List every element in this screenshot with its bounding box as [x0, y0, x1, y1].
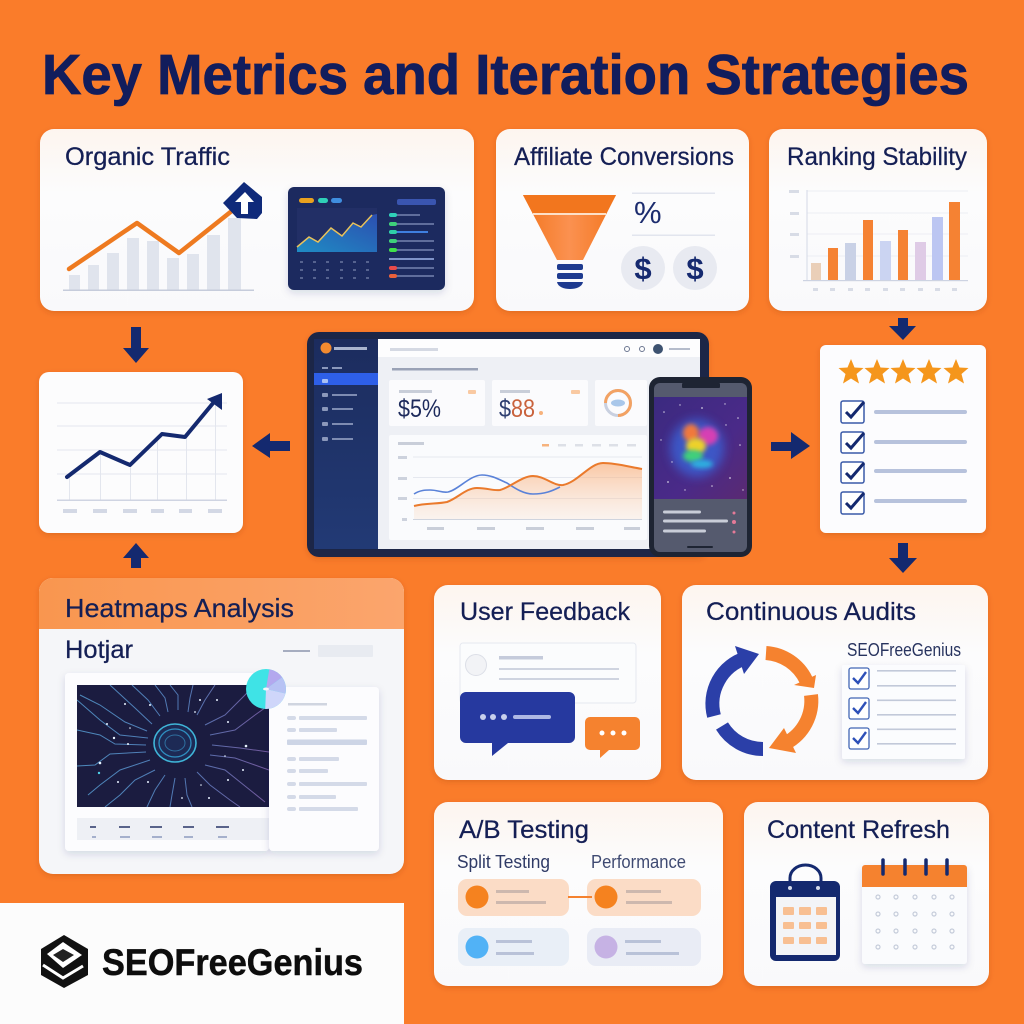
title: Key Metrics and Iteration Strategies [42, 43, 969, 107]
bar chart [789, 190, 968, 291]
icon: five stars [838, 359, 968, 384]
logo block [0, 903, 404, 1024]
header band [39, 578, 404, 629]
icon: clipboard calendar [770, 865, 840, 961]
arrow: up to growth chart [123, 543, 149, 568]
variant row: orange [458, 879, 701, 916]
heading: a/b testing: A/B Testing [459, 816, 589, 844]
heatmap image [77, 685, 269, 807]
heading: heatmaps analysis: Heatmaps Analysis [65, 593, 294, 623]
icon: wall calendar [862, 860, 967, 964]
bar and line chart with up arrow [63, 182, 262, 291]
heading: affiliate conversions: Affiliate Conversions [514, 143, 734, 171]
tablet main area [378, 339, 700, 549]
side details panel [269, 687, 379, 851]
browser frame [65, 673, 269, 851]
arrow: down to growth chart [123, 327, 149, 363]
heading: content refresh: Content Refresh [767, 816, 950, 844]
column label: split testing: Split Testing [457, 852, 550, 872]
panel: growth line chart [39, 372, 243, 533]
tablet top bar [378, 339, 700, 370]
arrow: right from dashboard [771, 432, 810, 459]
panel: ratings checklist [820, 345, 986, 533]
KPI card: revenue [492, 380, 588, 426]
icon: orange speech bubble [585, 717, 640, 758]
phone mockup [649, 377, 752, 557]
icon: dollar coins: $ [634, 251, 652, 286]
subheading: hotjar: Hotjar [65, 636, 133, 664]
heading: continuous audits: Continuous Audits [706, 598, 916, 626]
icon: dollar coins: $ [686, 251, 704, 286]
percent metric: % [634, 195, 662, 230]
heading: user feedback: User Feedback [460, 598, 630, 626]
icon: blue speech bubble [460, 692, 575, 756]
percent metric [632, 192, 715, 236]
area line chart [389, 435, 647, 540]
checklist rows [841, 401, 967, 514]
label: brand: SEOFreeGenius [847, 640, 961, 660]
tablet sidebar [314, 339, 378, 549]
icon: logo hexagon [41, 935, 88, 988]
arrow: down from ratings [889, 543, 917, 573]
icon: cycle arrows [712, 646, 816, 753]
heading: ranking stability: Ranking Stability [787, 143, 967, 171]
panel: ranking stability [769, 129, 987, 311]
panel: a/b testing [434, 802, 723, 986]
audit checklist [842, 665, 965, 759]
icon: dollar coins [621, 246, 717, 290]
phone heatmap image [654, 397, 747, 499]
data table strip [77, 818, 269, 840]
panel: affiliate conversions [496, 129, 749, 311]
icon: pie badge [246, 669, 286, 709]
panel: content refresh [744, 802, 989, 986]
heading: organic traffic: Organic Traffic [65, 143, 230, 171]
logo wordmark: SEOFreeGenius [102, 942, 363, 983]
arrow: left from dashboard [252, 433, 290, 458]
KPI card: donut [595, 380, 647, 426]
mini dashboard [288, 187, 445, 290]
panel: continuous audits [682, 585, 988, 780]
icon: funnel [523, 195, 616, 289]
KPI card: revenue: $88 [499, 395, 535, 423]
top filter control [283, 645, 373, 657]
variant row: blue and purple [458, 928, 701, 966]
panel: organic traffic [40, 129, 474, 311]
KPI card: percent: $5% [398, 395, 441, 423]
central tablet dashboard [307, 332, 752, 557]
line chart [57, 393, 227, 513]
arrow: down to ratings [889, 318, 916, 340]
KPI card: percent [389, 380, 485, 426]
panel: user feedback [434, 585, 661, 780]
comment card [460, 643, 636, 703]
column label: performance: Performance [591, 852, 686, 872]
panel: heatmaps analysis [39, 578, 404, 874]
